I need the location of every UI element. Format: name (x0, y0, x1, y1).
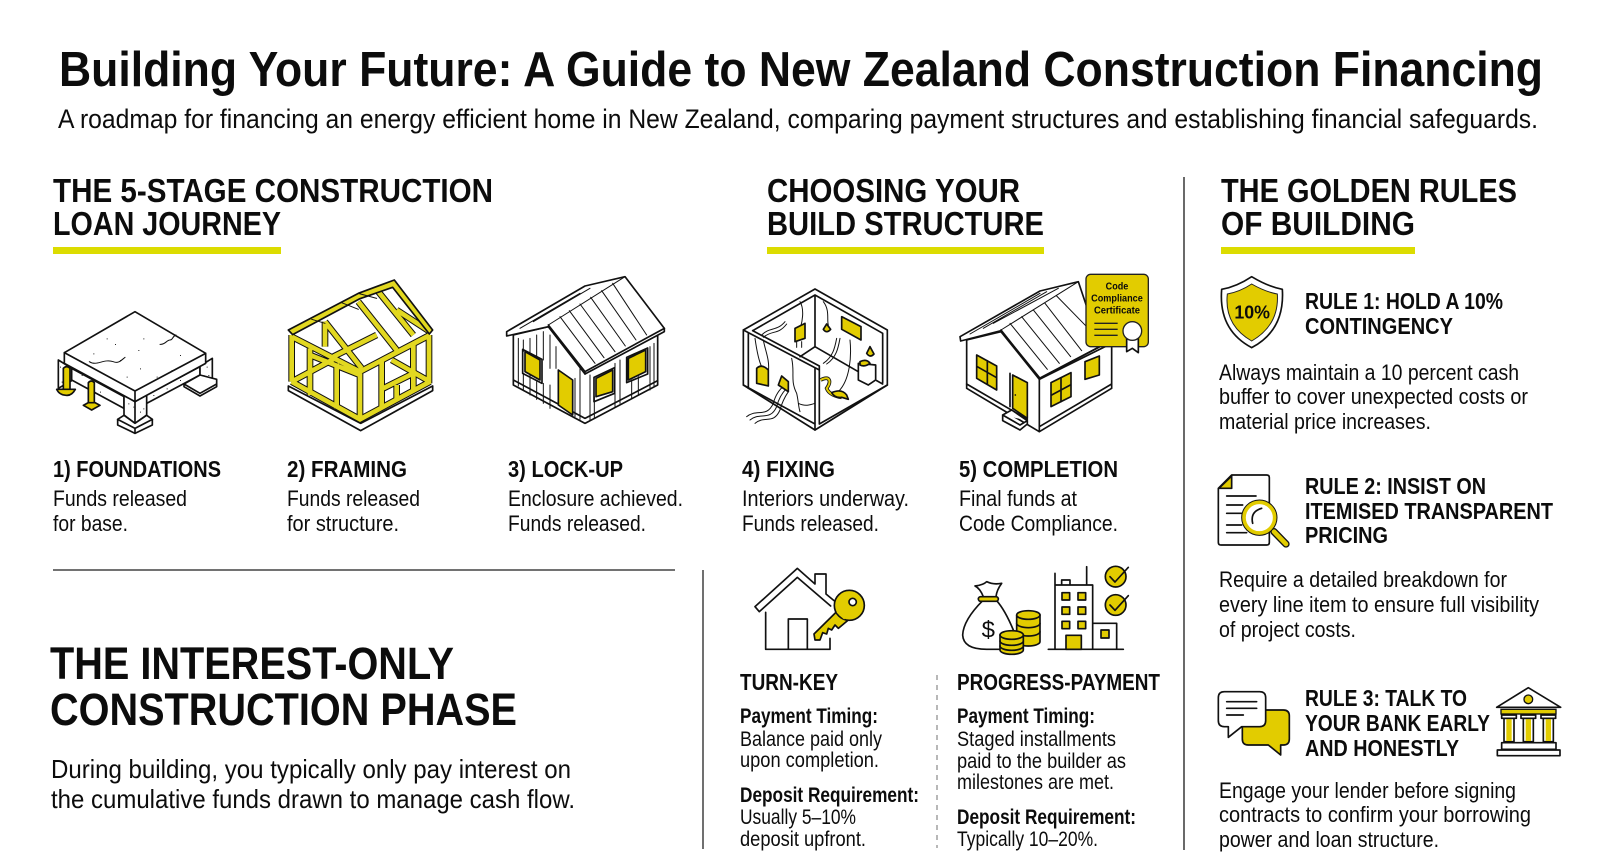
panel: rule 1 (1219, 288, 1528, 434)
panel: interest-only phase: CONSTRUCTION PHASE (50, 684, 517, 735)
panel: five-stage loan journey heading: THE 5-STAGE CONSTRUCTION (53, 173, 493, 210)
stage 1 label: Funds released (53, 486, 187, 511)
stage 1 label: 1) FOUNDATIONS (53, 456, 221, 482)
panel: turn-key: Deposit Requirement: (740, 784, 919, 807)
panel: rule 1: RULE 1: HOLD A 10% (1305, 288, 1503, 314)
panel: rule 2: RULE 2: INSIST ON (1305, 473, 1486, 499)
stage labels (53, 456, 1118, 536)
panel: rule 3: YOUR BANK EARLY (1305, 710, 1490, 736)
icon: speech bubbles (1218, 692, 1289, 755)
stage 3 label: 3) LOCK-UP (508, 456, 623, 482)
panel: turn-key: Payment Timing: (740, 705, 878, 728)
stage 4 label: Funds released. (742, 511, 879, 536)
stage 4 label: 4) FIXING (742, 456, 835, 482)
panel: interest-only phase: the cumulative funds drawn to manage cash flow. (51, 784, 575, 814)
stage 5 label: Code Compliance. (959, 511, 1118, 536)
panel: five-stage loan journey heading: LOAN JOURNEY (53, 206, 281, 243)
panel: rule 3 (1219, 685, 1531, 852)
panel: rule 1: buffer to cover unexpected costs or (1219, 384, 1528, 409)
icon: foundations (57, 312, 217, 433)
stage 2 label: Funds released (287, 486, 420, 511)
icon: money bag and building (963, 566, 1128, 654)
panel: rule 3: RULE 3: TALK TO (1305, 685, 1467, 711)
stage 3 label: Enclosure achieved. (508, 486, 683, 511)
icon: document and magnifier (1218, 475, 1286, 545)
panel: build structure heading: CHOOSING YOUR (767, 173, 1020, 210)
icon: framing (288, 280, 433, 431)
panel: golden rules heading (1221, 173, 1517, 254)
stage 5 label: Final funds at (959, 486, 1077, 511)
panel: progress-payment (957, 669, 1160, 851)
certificate: Certificate (1094, 305, 1140, 316)
panel: progress-payment: milestones are met. (957, 770, 1114, 794)
panel: rule 3: Engage your lender before signing (1219, 778, 1516, 803)
panel: turn-key: Usually 5–10% (740, 805, 856, 829)
stage 4 label: Interiors underway. (742, 486, 909, 511)
stage 1 label: for base. (53, 511, 128, 536)
stage 3 label: Funds released. (508, 511, 646, 536)
panel: build structure heading (767, 173, 1044, 254)
stage 5 label (959, 456, 1118, 536)
panel: progress-payment: paid to the builder as (957, 749, 1126, 773)
icon: money bag and building: $ (982, 616, 995, 642)
panel: rule 2: every line item to ensure full visibility (1219, 592, 1539, 617)
panel: interest-only phase: THE INTEREST-ONLY (50, 638, 454, 689)
panel: rule 2: PRICING (1305, 522, 1388, 548)
panel: progress-payment: Staged installments (957, 727, 1116, 751)
panel: golden rules heading: OF BUILDING (1221, 206, 1415, 243)
stage 4 label (742, 456, 909, 536)
panel: rule 3: contracts to confirm your borrowing (1219, 802, 1531, 827)
panel: progress-payment: PROGRESS-PAYMENT (957, 669, 1160, 695)
panel: rule 2: Require a detailed breakdown for (1219, 567, 1507, 592)
icon: shield 10% (1221, 277, 1283, 348)
icon: fixing room (743, 289, 887, 430)
panel: five-stage loan journey heading (53, 173, 493, 254)
panel: turn-key (740, 669, 919, 851)
panel: interest-only phase (50, 638, 575, 814)
panel: rule 1: CONTINGENCY (1305, 313, 1453, 339)
panel: rule 2: ITEMISED TRANSPARENT (1305, 498, 1553, 524)
stage 2 label (287, 456, 420, 536)
panel: rule 3: AND HONESTLY (1305, 735, 1459, 761)
panel: turn-key: Balance paid only (740, 727, 882, 751)
icon: house and key (755, 568, 864, 649)
icon: bank (1497, 688, 1561, 756)
stage 5 label: 5) COMPLETION (959, 456, 1118, 482)
header (58, 43, 1543, 134)
panel: rule 2 (1219, 473, 1553, 642)
panel: turn-key: TURN-KEY (740, 669, 838, 695)
panel: turn-key: deposit upfront. (740, 827, 866, 851)
stage 2 label: 2) FRAMING (287, 456, 407, 482)
panel: golden rules heading: THE GOLDEN RULES (1221, 173, 1517, 210)
icon: completion house with certificate (960, 274, 1148, 432)
icon: shield 10%: 10% (1234, 301, 1270, 322)
panel: rule 1: Always maintain a 10 percent cash (1219, 360, 1519, 385)
panel: progress-payment: Payment Timing: (957, 705, 1095, 728)
certificate: Compliance (1091, 293, 1143, 304)
icon: lock-up house (507, 277, 664, 423)
stage 1 label (53, 456, 221, 536)
stage 3 label (508, 456, 683, 536)
certificate: Code (1106, 281, 1129, 292)
panel: build structure heading: BUILD STRUCTURE (767, 206, 1044, 243)
panel: interest-only phase: During building, you typically only pay interest on (51, 754, 571, 784)
panel: turn-key: upon completion. (740, 748, 879, 772)
panel: rule 2: of project costs. (1219, 617, 1356, 642)
panel: rule 3: power and loan structure. (1219, 827, 1439, 852)
panel: rule 1: material price increases. (1219, 409, 1431, 434)
panel: progress-payment: Deposit Requirement: (957, 806, 1136, 829)
certificate (1086, 274, 1148, 353)
stage 2 label: for structure. (287, 511, 399, 536)
panel: progress-payment: Typically 10–20%. (957, 827, 1098, 851)
